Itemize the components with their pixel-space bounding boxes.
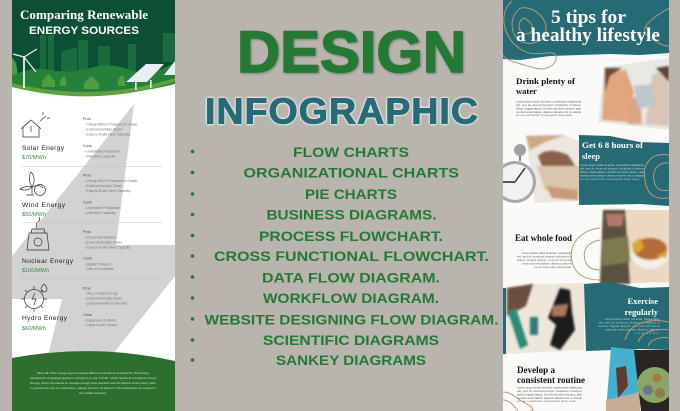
tip 5: routine: ex ea commodo consequat duis aute. bbox=[517, 399, 577, 403]
decoration: swirl bbox=[571, 228, 600, 280]
panel: healthy lifestyle infographic bbox=[494, 0, 673, 411]
tip 3: whole food: elit, sed do eiusmod tempor incididunt ut bbox=[517, 254, 572, 258]
bullet list: diagram types: PIE CHARTS bbox=[305, 186, 397, 202]
tip 4: exercise bbox=[503, 282, 669, 354]
teal box: exercise text bbox=[584, 282, 669, 351]
row: solar energy: - Inflexible Capacity bbox=[84, 154, 116, 158]
bullet list: diagram types: ORGANIZATIONAL CHARTS bbox=[244, 164, 459, 180]
bullet list: diagram types: PROCESS FLOWCHART. bbox=[259, 228, 443, 244]
bullet list: diagram types bbox=[191, 144, 498, 368]
tip 5: routine: Lorem ipsum dolor sit amet, consectetur adipiscing bbox=[517, 386, 582, 390]
footer: green note: Energy, which represents an average energy price required over the lifetime of the power plant bbox=[30, 381, 156, 385]
icon: wind turbine coin bbox=[20, 172, 46, 196]
footer: green note: standard for comparing apples to oranges is to use "LCOE", which stands for Levelized Cost of bbox=[30, 376, 156, 380]
bullet list: diagram types: FLOW CHARTS bbox=[293, 144, 409, 160]
tip 4: exercise: Lorem ipsum dolor sit amet, consectetur bbox=[605, 317, 660, 321]
bullet list: diagram types: SCIENTIFIC DIAGRAMS bbox=[263, 332, 439, 348]
bullet list: diagram types: WORKFLOW DIAGRAM. bbox=[263, 290, 439, 306]
row: hydro energy bbox=[21, 284, 128, 332]
row: wind energy: - Environmentally Clean bbox=[84, 184, 122, 188]
bullet list: diagram types: BUSINESS DIAGRAMS. bbox=[266, 206, 436, 222]
icon: alarm clock bbox=[503, 144, 536, 203]
tip 4: exercise: Exercise bbox=[627, 296, 658, 306]
row: wind energy: $55/MWh bbox=[22, 212, 46, 218]
photo: man sleeping bbox=[526, 135, 580, 203]
row: nuclear energy: Cons: bbox=[83, 256, 92, 260]
tip 1: drink water: water bbox=[516, 86, 537, 96]
row: hydro energy: Cons: bbox=[83, 313, 92, 317]
tip 5: routine: elit, sed do eiusmod tempor incididunt ut labore bbox=[517, 389, 582, 393]
tip 3: whole food: ex ea commodo consequat. bbox=[534, 265, 572, 269]
tip 1: drink water: nostrud exercitation ullamco laboris nisi ut aliquip bbox=[516, 110, 581, 114]
title: infographic: INFOGRAPHIC bbox=[205, 90, 479, 132]
background: grey lightning bolt bbox=[12, 104, 175, 355]
tip 3: whole food: Lorem ipsum dolor sit amet, consectetur bbox=[522, 251, 572, 255]
tip 5: routine: Develop a bbox=[517, 365, 555, 375]
tip 5: routine: nostrud exercitation ullamco laboris nisi ut aliquip bbox=[517, 396, 582, 400]
header: dark green banner bbox=[12, 0, 175, 96]
row: wind energy: Wind Energy bbox=[22, 202, 66, 209]
decoration: tan swirl lines bbox=[503, 1, 669, 69]
row: solar energy: $70/MWh bbox=[22, 155, 46, 161]
tip 4: exercise: nostrud exercitation ullamco laboris bbox=[605, 328, 661, 332]
photo: woman drinking water bbox=[598, 58, 669, 130]
tip 1: drink water: dolore magna aliqua. Ut enim ad minim veniam, quis bbox=[516, 106, 582, 110]
heading: comparing renewable energy sources: ENERGY SOURCES bbox=[29, 25, 139, 37]
tip 5: routine: dolore magna aliqua. Ut enim ad minim veniam, quis bbox=[517, 392, 583, 396]
tip 2: sleep: Get 6 8 hours of bbox=[582, 140, 643, 150]
tip 1: drink water bbox=[516, 58, 669, 130]
row: hydro energy: - Large Local Impact bbox=[84, 323, 117, 327]
heading: comparing renewable energy sources bbox=[20, 10, 148, 34]
tip 1: drink water: Drink plenty of bbox=[516, 76, 575, 86]
panel: renewable energy infographic bbox=[12, 0, 175, 411]
icon: nuclear reactor bbox=[27, 217, 49, 250]
row: nuclear energy: Nuclear Energy bbox=[22, 258, 74, 265]
row: hydro energy: - Expensive to Build bbox=[84, 318, 116, 322]
row: wind energy: - Easy to Build New Capacity bbox=[84, 189, 131, 193]
illustration: wind turbine bbox=[13, 49, 37, 88]
heading: 5 tips for a healthy lifestyle: 5 tips for bbox=[551, 7, 627, 28]
tip 2: sleep: Lorem ipsum dolor sit amet, consectetur adipiscing bbox=[580, 163, 644, 167]
tip 2: sleep: nostrud exercitation ullamco laboris nisi ut aliquip bbox=[580, 174, 644, 178]
row: nuclear energy: Pros: bbox=[83, 230, 91, 234]
row: nuclear energy: - Environmentally Clean bbox=[84, 240, 122, 244]
tip 2: sleep: dolore magna aliqua. Ut enim ad minim veniam, quis bbox=[580, 170, 645, 174]
row: hydro energy: - Environmentally Clean bbox=[84, 296, 122, 300]
bullet list: diagram types: CROSS FUNCTIONAL FLOWCHART. bbox=[214, 248, 489, 264]
tip 2: sleep: ex ea commodo consequat duis aute. bbox=[580, 177, 640, 181]
tip 4: exercise: regularly bbox=[625, 307, 659, 317]
tip 4: exercise: dolore magna aliqua. Ut enim ad minim bbox=[598, 324, 661, 328]
heading: 5 tips for a healthy lifestyle: a healthy lifestyle bbox=[516, 25, 660, 46]
row: solar energy: - Unreliable Production bbox=[84, 150, 121, 154]
row: wind energy: - Inflexible Capacity bbox=[84, 211, 116, 215]
row: hydro energy: - Quick Reliable Production bbox=[84, 302, 128, 306]
row: wind energy: - Unreliable Production bbox=[84, 206, 121, 210]
tip 4: exercise: elit, sed do eiusmod tempor incididunt ut bbox=[598, 320, 660, 324]
tip 3: whole food: dolore magna aliqua. Ut enim ad minim bbox=[517, 258, 573, 262]
row: nuclear energy: - Risk of Accidents bbox=[84, 267, 114, 271]
photo: healthy food bbox=[600, 210, 669, 284]
photo: battle ropes and salad bbox=[606, 347, 673, 411]
tip 2: sleep bbox=[494, 135, 669, 206]
tip 3: whole food bbox=[515, 210, 669, 284]
row: nuclear energy: - Waste Problem bbox=[84, 262, 111, 266]
row: nuclear energy: - Inherently Reliable bbox=[84, 236, 116, 240]
bullet list: diagram types: DATA FLOW DIAGRAM. bbox=[262, 270, 440, 286]
tip 4: exercise: commodo. bbox=[635, 331, 660, 335]
row: solar energy: Solar Energy bbox=[22, 145, 65, 152]
footer: green note: Since all of the energy sources require different amounts of investments, the industry bbox=[37, 371, 150, 375]
row: wind energy bbox=[20, 172, 137, 218]
teal box: sleep text bbox=[579, 135, 669, 206]
illustration: green city skyline bbox=[12, 33, 175, 96]
row: nuclear energy: $100/MWh bbox=[22, 268, 49, 274]
photo: woman stretching with dumbbells bbox=[503, 283, 584, 354]
tip 5: routine: consistent routine bbox=[517, 375, 585, 385]
row: solar energy: Cons: bbox=[83, 144, 92, 148]
tip 1: drink water: elit, sed do eiusmod tempor incididunt ut labore bbox=[516, 103, 581, 107]
header: teal torn banner bbox=[503, 0, 669, 60]
footer: green note bbox=[12, 351, 175, 411]
row: solar energy bbox=[21, 112, 137, 161]
icon: solar house bbox=[21, 112, 50, 137]
heading: comparing renewable energy sources: Comparing Renewable bbox=[20, 7, 148, 22]
row: hydro energy: - Very Cheap Energy bbox=[84, 292, 118, 296]
row: solar energy: - Environmentally Clean bbox=[84, 128, 122, 132]
row: wind energy: Pros: bbox=[83, 174, 91, 178]
row: wind energy: - Cheap When Produced in Scale bbox=[84, 179, 137, 183]
bullet list: diagram types: WEBSITE DESIGNING FLOW DIAGRAM. bbox=[204, 312, 498, 328]
tip 1: drink water: ex ea commodo consequat duis aute. bbox=[516, 113, 573, 117]
row: solar energy: - Easy to Build New Capacity bbox=[84, 132, 131, 136]
row: hydro energy: Pros: bbox=[83, 286, 91, 290]
row: solar energy: Pros: bbox=[83, 117, 91, 121]
row: solar energy: - Cheap When Produced in Scale bbox=[84, 122, 137, 126]
illustration: solar panels bbox=[126, 61, 175, 90]
row: hydro energy: Hydro Energy bbox=[22, 315, 68, 322]
tip 2: sleep: sleep bbox=[582, 151, 600, 161]
row: wind energy: Cons: bbox=[83, 200, 92, 204]
tip 3: whole food: Eat whole food bbox=[515, 233, 572, 243]
row: hydro energy: $60/MWh bbox=[22, 326, 46, 332]
title: design: DESIGN bbox=[237, 20, 466, 85]
footer: green note: to recover the cost of construction, upkeep and fuel. All figures in this infographic are based on bbox=[30, 386, 156, 390]
tip 1: drink water: Lorem ipsum dolor sit amet, consectetur adipiscing bbox=[516, 100, 581, 104]
footer: green note: the LCOE estimates. bbox=[79, 391, 107, 395]
row: nuclear energy: - Easy to Build New Capacity bbox=[84, 246, 131, 250]
tip 5: routine bbox=[503, 347, 673, 411]
row: nuclear energy bbox=[22, 217, 131, 274]
tip 3: whole food: nostrud exercitation ullamco laboris bbox=[522, 262, 573, 266]
tip 2: sleep: elit, sed do eiusmod tempor incididunt ut labore bbox=[580, 166, 644, 170]
heading: 5 tips for a healthy lifestyle bbox=[516, 7, 660, 46]
bullet list: diagram types: SANKEY DIAGRAMS bbox=[276, 352, 426, 368]
icon: hydro gear bbox=[21, 284, 47, 312]
